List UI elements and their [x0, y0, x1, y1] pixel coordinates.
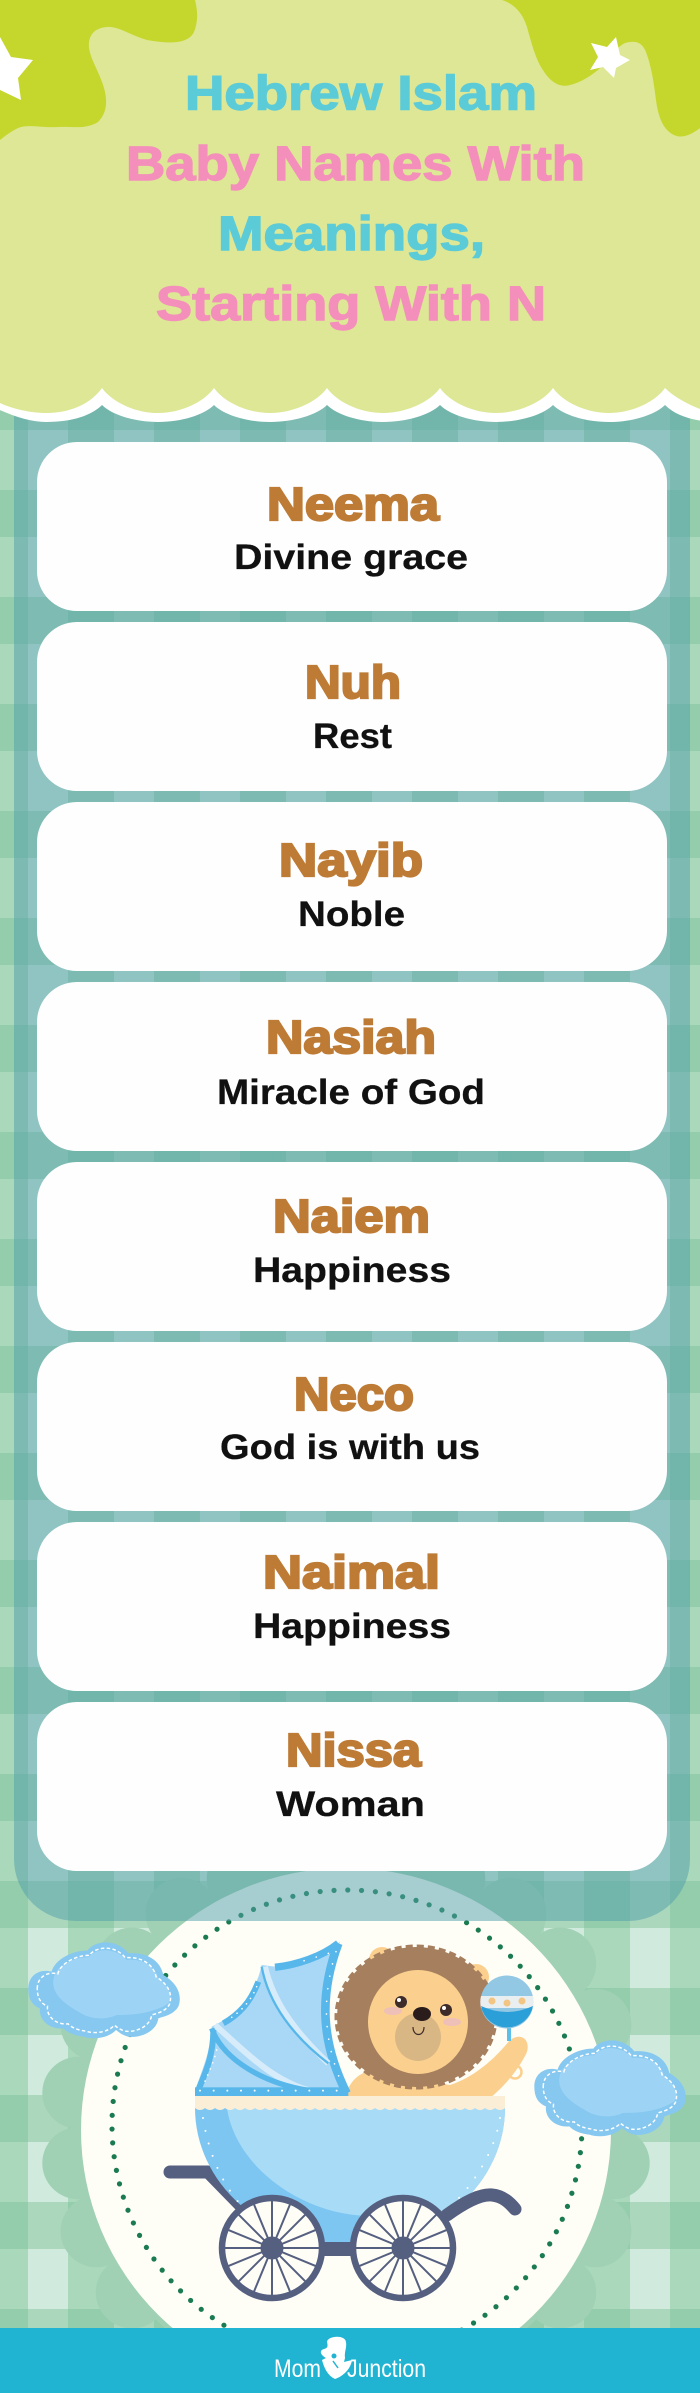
- card: Naimal: [37, 1522, 667, 1691]
- right cloud: [534, 2040, 686, 2136]
- card: Nayib: [37, 802, 667, 971]
- card: Naimal: Happiness: [253, 1607, 451, 1646]
- title: Hebrew Islam: [185, 68, 537, 120]
- logo wordmark: Junction: [347, 2355, 426, 2383]
- card: Nuh: Nuh: [305, 656, 401, 708]
- card: Neema: Divine grace: [234, 538, 468, 577]
- left wheel: [222, 2198, 322, 2298]
- title: Baby Names With: [126, 138, 585, 191]
- rear handle: [447, 2195, 515, 2215]
- rattle: [480, 1976, 534, 2041]
- scalloped green medallion: [42, 1824, 650, 2393]
- lion face: [368, 1970, 468, 2074]
- title: [126, 68, 585, 331]
- header background with scallops: [0, 0, 700, 413]
- card: Neco: [37, 1342, 667, 1511]
- card: Naimal: Naimal: [263, 1546, 440, 1598]
- stroller canopy: [195, 1942, 348, 2096]
- title: Starting With N: [156, 278, 546, 331]
- card: Nissa: [37, 1702, 667, 1871]
- card: Neco: God is with us: [220, 1428, 480, 1467]
- stroller bowl: [195, 2108, 520, 2245]
- star: right: [590, 37, 630, 78]
- card: Naiem: [37, 1162, 667, 1331]
- card: Nuh: [37, 622, 667, 791]
- white medallion circle: [81, 1868, 611, 2392]
- card: Neema: Neema: [267, 478, 439, 530]
- logo mark: [321, 2337, 352, 2379]
- card: Neema: [37, 442, 667, 611]
- translucent teal panel: [14, 0, 690, 1921]
- lion: [337, 1947, 528, 2098]
- card: Neco: Neco: [294, 1368, 414, 1420]
- lion muzzle: [395, 2013, 441, 2061]
- card: Naiem: Naiem: [273, 1190, 430, 1242]
- card: Nayib: Nayib: [279, 834, 423, 886]
- card: Nissa: Woman: [276, 1785, 425, 1824]
- star: left: [0, 37, 33, 100]
- name cards: [37, 442, 667, 1871]
- card: Nasiah: Miracle of God: [217, 1073, 485, 1112]
- card: Naiem: Happiness: [253, 1251, 451, 1290]
- lion arm and body: [345, 2037, 528, 2098]
- header: [0, 0, 700, 422]
- card: Nasiah: [37, 982, 667, 1151]
- green blob: top left: [0, 0, 197, 140]
- lion ears: [369, 1947, 489, 1990]
- stroller handle: [170, 2172, 247, 2212]
- footer bar: [0, 2328, 700, 2393]
- card: Nasiah: Nasiah: [266, 1011, 436, 1063]
- right wheel: [353, 2198, 453, 2298]
- green blob: top right: [502, 0, 700, 136]
- dotted ring: [112, 1890, 582, 2360]
- title: Meanings,: [218, 208, 485, 261]
- axle: [320, 2242, 356, 2256]
- white scalloped edge: [0, 300, 700, 422]
- logo wordmark: [274, 2355, 426, 2383]
- card: Nuh: Rest: [313, 717, 392, 756]
- lion eyes and nose: [384, 1996, 461, 2034]
- left cloud: [28, 1942, 180, 2038]
- baby stroller with lion: [170, 1942, 534, 2298]
- lion mane: [337, 1947, 495, 2087]
- card: Nayib: Noble: [298, 895, 405, 934]
- card: Nissa: Nissa: [286, 1724, 421, 1776]
- stroller lace trim: [195, 2096, 505, 2110]
- logo wordmark: Mom: [274, 2355, 321, 2383]
